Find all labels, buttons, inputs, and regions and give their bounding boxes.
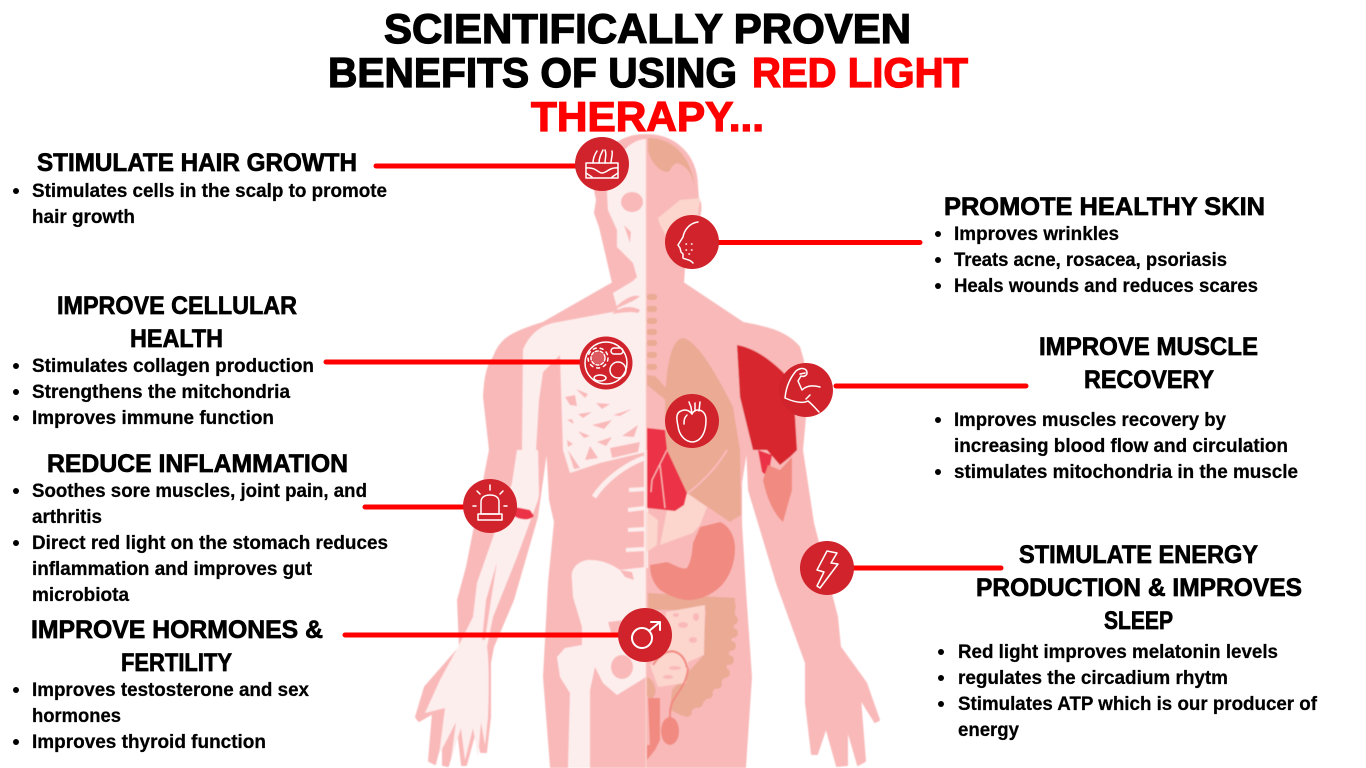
text block: inflammation: inflammation and improves gut [32, 559, 313, 580]
text block: hair growth [13, 149, 387, 228]
stomach [650, 522, 735, 600]
rib gaps [565, 389, 640, 469]
elbow muscle [510, 506, 534, 519]
text block: inflammation: microbiota [32, 585, 129, 606]
text block: energy and sleep: Red light improves melatonin levels [958, 642, 1278, 663]
forearm gap [482, 562, 497, 640]
text block: energy and sleep: regulates the circadium rhytm [958, 668, 1228, 689]
text block: cellular health: Improves immune function [32, 408, 274, 429]
body silhouette [416, 135, 879, 767]
text block: hair growth: STIMULATE HAIR GROWTH [37, 149, 357, 177]
text block: cellular health: HEALTH [130, 325, 223, 353]
skeleton: skull [607, 139, 646, 281]
clavicle detail [612, 296, 640, 314]
line: hair [376, 164, 580, 168]
text block: hormones and fertility: IMPROVE HORMONES & [31, 616, 323, 644]
icon: energy bolt [800, 541, 854, 595]
text block: energy and sleep [938, 541, 1318, 741]
text block: hair growth: Stimulates cells in the scalp to promote [32, 181, 387, 202]
icon: cell [580, 336, 632, 390]
connector lines [326, 166, 1026, 635]
text block: hair growth: hair growth [32, 207, 135, 228]
lungs [665, 338, 741, 522]
heart organ [647, 428, 687, 511]
spine beads [647, 294, 657, 370]
lower rib and spine [594, 450, 646, 568]
text block: energy and sleep: Stimulates ATP which is our producer of [958, 694, 1318, 715]
text block: hormones and fertility: Improves thyroid function [32, 732, 266, 753]
text block: muscle recovery: stimulates mitochondria in the muscle [954, 462, 1298, 483]
text block: hormones and fertility: hormones [32, 706, 121, 727]
center divide [646, 139, 647, 768]
icon: muscle [779, 363, 833, 417]
text block: inflammation: Direct red light on the stomach reduces [32, 533, 388, 554]
text block: energy and sleep: STIMULATE ENERGY [1019, 541, 1258, 569]
icon: face [665, 215, 719, 269]
text block: muscle recovery: Improves muscles recovery by [954, 410, 1226, 431]
title: BENEFITS OF USING [328, 49, 737, 96]
text block: cellular health: Strengthens the mitchondria [32, 382, 290, 403]
text block: inflammation: arthritis [32, 507, 102, 528]
line: skin [718, 240, 920, 245]
text block: muscle recovery: RECOVERY [1084, 366, 1214, 394]
title: RED LIGHT [752, 49, 968, 96]
text block: muscle recovery: IMPROVE MUSCLE [1039, 333, 1258, 361]
text block: cellular health [13, 292, 314, 429]
text block: healthy skin: Treats acne, rosacea, psoriasis [954, 250, 1227, 271]
icon: male symbol [618, 608, 672, 662]
text block: muscle recovery: increasing blood flow and circulation [954, 436, 1288, 457]
text block: healthy skin: Heals wounds and reduces scares [954, 276, 1258, 297]
skeleton: chest and ribs [522, 280, 646, 473]
icon: heart [665, 394, 719, 448]
arm bones [425, 450, 539, 760]
line: cellular [326, 360, 582, 364]
text block: energy and sleep: energy [958, 720, 1019, 741]
small intestine [650, 605, 705, 687]
diaphragm line [688, 450, 727, 493]
text block: healthy skin [935, 193, 1265, 297]
text block: energy and sleep: PRODUCTION & IMPROVES [976, 574, 1302, 602]
text block: inflammation [13, 450, 388, 606]
large intestine [647, 593, 738, 717]
title [328, 5, 968, 140]
text block: muscle recovery [935, 333, 1298, 483]
text block: inflammation: Soothes sore muscles, joint pain, and [32, 481, 367, 502]
line: inflammation [365, 504, 470, 510]
text block: inflammation: REDUCE INFLAMMATION [47, 450, 348, 478]
text block: hormones and fertility: Improves testosterone and sex [32, 680, 309, 701]
line: muscle [836, 384, 1026, 388]
title: THERAPY... [531, 93, 764, 140]
throat tissue [658, 198, 700, 258]
icon: alarm [463, 479, 517, 533]
line: energy [851, 566, 1001, 570]
text block: hormones and fertility: FERTILITY [121, 649, 232, 677]
arm muscle accents [758, 450, 792, 522]
skull eye and nose [621, 192, 643, 243]
trachea [647, 375, 668, 402]
body illustration [416, 135, 879, 768]
text block: healthy skin: PROMOTE HEALTHY SKIN [944, 193, 1265, 221]
text block: cellular health: Stimulates collagen production [32, 356, 314, 377]
reproductive organs [647, 651, 688, 760]
liver [647, 493, 707, 552]
line: hormones [345, 632, 623, 638]
text block: healthy skin: Improves wrinkles [954, 224, 1119, 245]
text block: energy and sleep: SLEEP [1104, 607, 1173, 635]
brain [648, 138, 695, 190]
icon: hair [575, 137, 629, 191]
text block: cellular health: IMPROVE CELLULAR [57, 292, 297, 320]
hip gaps [608, 570, 634, 679]
text block: hormones and fertility [13, 616, 323, 753]
title: SCIENTIFICALLY PROVEN [384, 5, 911, 52]
shoulder muscle [737, 345, 797, 465]
pelvis and femur [557, 560, 646, 768]
